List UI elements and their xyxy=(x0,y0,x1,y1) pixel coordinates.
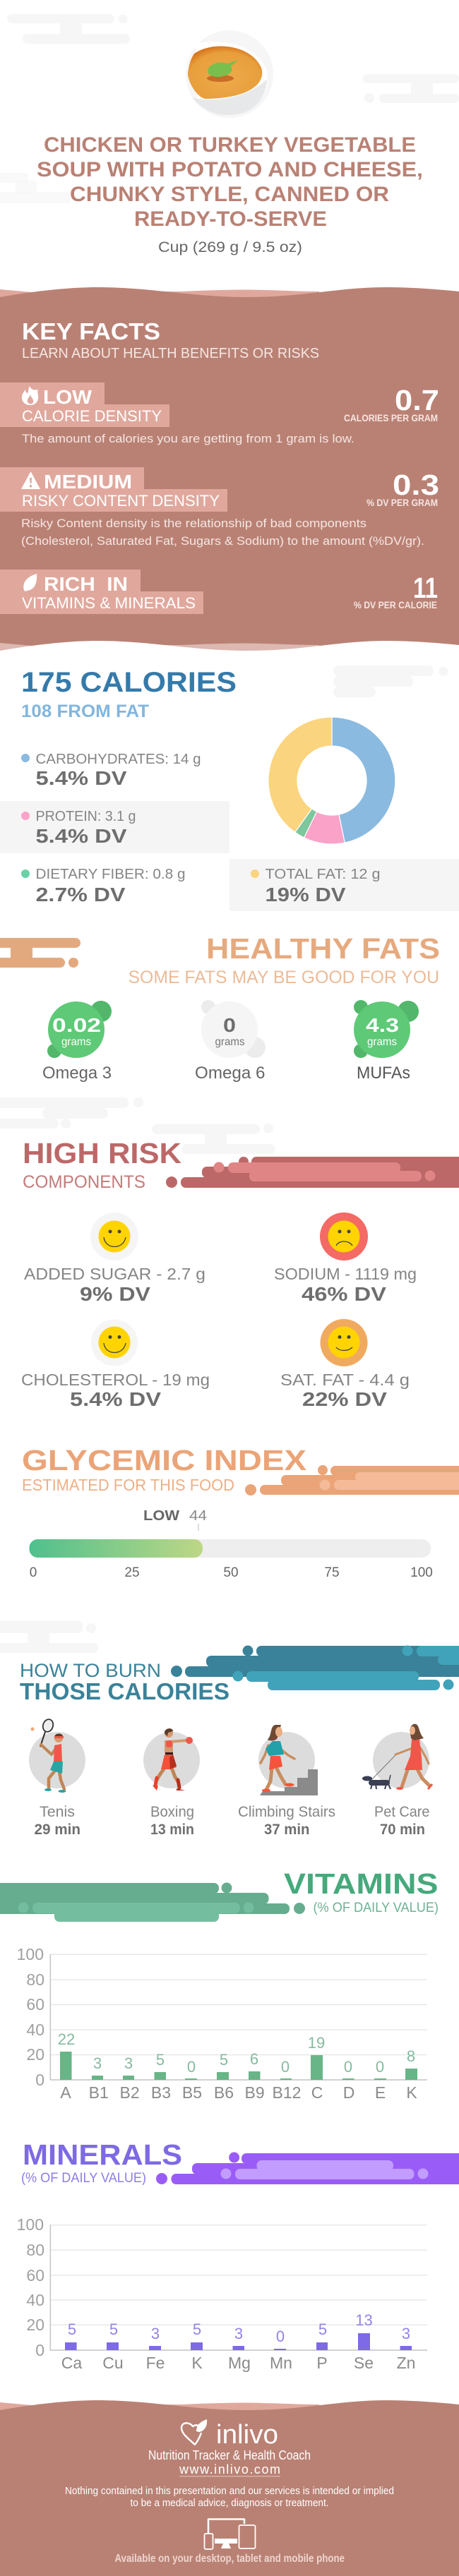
omega 6: 0 xyxy=(223,1014,236,1036)
bar chart: vitamins: B5 xyxy=(182,2083,202,2102)
decorative blob xyxy=(0,938,81,968)
bar chart: vitamins: D xyxy=(343,2083,354,2102)
title xyxy=(37,133,423,231)
mufas: 4.3 xyxy=(366,1014,399,1036)
decorative blob xyxy=(166,1157,459,1188)
bar chart: vitamins: 0 xyxy=(376,2058,384,2076)
omega 6: Omega 6 xyxy=(195,1064,266,1083)
subheading: (% OF DAILY VALUE) xyxy=(314,1901,439,1915)
bar chart: vitamins: 60 xyxy=(26,1995,44,2014)
omega 3: 0.02 xyxy=(52,1014,101,1036)
macro: dietary fiber xyxy=(21,867,185,905)
heading: HOW TO BURN xyxy=(20,1660,161,1681)
subheading: from fat: 108 FROM FAT xyxy=(21,702,149,721)
bar chart: vitamins: B6 xyxy=(214,2083,234,2102)
bar chart: vitamins xyxy=(17,1945,427,2102)
value: 0.3: 0.3 xyxy=(393,469,439,501)
bar chart: minerals: Zn xyxy=(397,2354,415,2372)
label: calorie density: CALORIE DENSITY xyxy=(22,407,162,425)
decorative cloud: burn xyxy=(0,1620,98,1653)
omega 6: grams xyxy=(215,1036,244,1048)
gauge axis: 50 xyxy=(223,1565,239,1580)
item: cholesterol xyxy=(21,1320,210,1410)
bar chart: vitamins: 22 xyxy=(58,2030,75,2048)
gauge axis: 0 xyxy=(30,1565,37,1580)
website: www.inlivo.com xyxy=(179,2462,280,2476)
decorative blob xyxy=(245,1465,459,1495)
item: saturated fat xyxy=(280,1319,410,1410)
disclaimer xyxy=(65,2485,394,2509)
bar chart: minerals: 3 xyxy=(151,2325,160,2342)
gauge axis: 100 xyxy=(410,1565,433,1580)
macro: carbohydrates xyxy=(21,752,201,789)
bar chart: minerals: Fe xyxy=(146,2354,165,2372)
macro: dietary fiber: DIETARY FIBER: 0.8 g xyxy=(35,867,185,882)
macro: total fat: 19% DV xyxy=(266,884,346,905)
section: glycemic index xyxy=(22,1444,459,1580)
decorative clouds: header xyxy=(0,14,459,203)
mufas: grams xyxy=(367,1036,397,1048)
bar chart: vitamins: 8 xyxy=(407,2047,415,2065)
bar chart: minerals: 0 xyxy=(35,2341,44,2359)
bar chart: vitamins: 20 xyxy=(26,2045,44,2064)
label: Climbing Stairs xyxy=(238,1804,335,1820)
bar chart: minerals: 13 xyxy=(355,2311,373,2329)
icon: warning triangle xyxy=(21,471,40,489)
heading: high risk: HIGH RISK xyxy=(23,1137,181,1169)
panel: key facts xyxy=(0,287,459,655)
description xyxy=(21,517,424,548)
decorative blob xyxy=(0,1883,305,1922)
heading xyxy=(20,1660,230,1704)
unit: dv per gram: % DV PER GRAM xyxy=(366,498,438,508)
availability note: Available on your desktop, tablet and mobile phone xyxy=(114,2553,345,2565)
item: cholesterol: 5.4% DV xyxy=(70,1388,161,1410)
macro: protein: 5.4% DV xyxy=(35,825,127,847)
tagline: Nutrition Tracker & Health Coach xyxy=(148,2448,311,2462)
value: 0.7: 0.7 xyxy=(395,384,439,416)
bar chart: minerals: Mn xyxy=(270,2354,292,2372)
bar chart: vitamins: 0 xyxy=(187,2058,196,2076)
bar chart: vitamins: 19 xyxy=(308,2034,325,2052)
bar chart: minerals: Cu xyxy=(102,2354,124,2372)
section: healthy fats xyxy=(0,932,440,1083)
bar chart: minerals: 0 xyxy=(276,2328,285,2345)
bar chart: vitamins: 0 xyxy=(281,2058,290,2076)
macro: protein xyxy=(0,801,230,853)
macro: total fat xyxy=(230,859,459,911)
icon: soup bowl xyxy=(186,30,273,118)
title: SOUP WITH POTATO AND CHEESE, xyxy=(37,158,423,181)
value: 11: 11 xyxy=(413,572,438,604)
level: medium: MEDIUM xyxy=(44,471,132,493)
description: The amount of calories you are getting from 1 gram is low. xyxy=(22,432,354,445)
activity: boxing xyxy=(143,1728,200,1838)
label: risky content density: RISKY CONTENT DENSITY xyxy=(22,492,220,510)
bar chart: vitamins: 40 xyxy=(26,2021,44,2039)
bar chart: minerals: 20 xyxy=(26,2316,44,2334)
bar chart: vitamins: 80 xyxy=(26,1970,44,1989)
heading: THOSE CALORIES xyxy=(20,1678,230,1704)
icon: leaf xyxy=(23,574,37,591)
decorative cloud: calories xyxy=(333,666,448,697)
omega 6 xyxy=(195,1000,266,1083)
description: Risky Content density is the relationship of bad components xyxy=(21,517,366,530)
bar chart: minerals: 3 xyxy=(402,2325,410,2342)
bar chart: vitamins: B3 xyxy=(151,2083,171,2102)
label: Boxing xyxy=(150,1804,194,1820)
bar chart: minerals: 5 xyxy=(193,2321,201,2338)
section: calories xyxy=(0,667,459,911)
fact: rich in vitamins and minerals xyxy=(0,570,438,614)
bar chart: vitamins: 5 xyxy=(156,2051,165,2069)
bar chart: vitamins: 5 xyxy=(220,2051,228,2069)
icon: flame xyxy=(22,386,38,405)
heading: key facts: KEY FACTS xyxy=(22,318,160,344)
item: added sugar xyxy=(24,1212,205,1305)
decorative blob xyxy=(171,1646,459,1690)
subheading: ESTIMATED FOR THIS FOOD xyxy=(22,1476,234,1494)
duration: 29 min xyxy=(34,1822,81,1838)
logo text: inlivo xyxy=(216,2420,278,2450)
heading: vitamins: VITAMINS xyxy=(284,1867,438,1900)
section: minerals xyxy=(17,2138,459,2372)
bar chart: minerals: Mg xyxy=(228,2354,251,2372)
macro: protein: PROTEIN: 3.1 g xyxy=(35,809,136,824)
macro: dietary fiber: 2.7% DV xyxy=(35,884,126,905)
item: added sugar: ADDED SUGAR - 2.7 g xyxy=(24,1265,205,1283)
gauge axis xyxy=(30,1565,433,1580)
bar chart: minerals: 60 xyxy=(26,2266,44,2285)
subheading: key facts: LEARN ABOUT HEALTH BENEFITS OR RISKS xyxy=(22,346,319,361)
serving size: Cup (269 g / 9.5 oz) xyxy=(158,239,302,255)
gauge axis: 75 xyxy=(324,1565,340,1580)
subheading: (% OF DAILY VALUE) xyxy=(21,2171,146,2186)
title: CHUNKY STYLE, CANNED OR xyxy=(70,183,389,206)
bar chart: minerals: Se xyxy=(354,2354,374,2372)
bar chart: vitamins: 3 xyxy=(124,2054,133,2072)
bar chart: vitamins: 100 xyxy=(17,1945,44,1963)
section: vitamins xyxy=(0,1867,439,2102)
duration: 13 min xyxy=(150,1822,194,1838)
unit: calories per gram: CALORIES PER GRAM xyxy=(344,413,438,423)
bar chart: minerals: 100 xyxy=(17,2215,44,2234)
bar chart: minerals: K xyxy=(191,2354,203,2372)
bar chart: vitamins: B2 xyxy=(120,2083,140,2102)
item: sodium: SODIUM - 1119 mg xyxy=(274,1265,417,1283)
heading: glycemic index: GLYCEMIC INDEX xyxy=(22,1444,306,1476)
duration: 37 min xyxy=(264,1822,309,1838)
mufas xyxy=(354,1000,419,1083)
bar chart: minerals xyxy=(17,2215,427,2372)
mufas: MUFAs xyxy=(357,1064,410,1083)
level: low: LOW xyxy=(43,386,93,408)
gauge label xyxy=(143,1508,207,1531)
item: cholesterol: CHOLESTEROL - 19 mg xyxy=(21,1371,210,1389)
subheading: components: COMPONENTS xyxy=(23,1172,145,1192)
gauge label: 44 xyxy=(189,1508,207,1524)
macro: total fat: TOTAL FAT: 12 g xyxy=(266,867,380,882)
bar chart: vitamins: B1 xyxy=(89,2083,109,2102)
item: sodium: 46% DV xyxy=(302,1283,386,1305)
activity: tennis xyxy=(29,1718,85,1838)
bar chart: minerals: 40 xyxy=(26,2291,44,2309)
gauge axis: 25 xyxy=(124,1565,140,1580)
decorative blob xyxy=(156,2153,459,2184)
bar chart: minerals: 5 xyxy=(318,2321,327,2338)
bar chart: vitamins: C xyxy=(311,2083,323,2102)
level: rich in: RICH IN xyxy=(44,573,128,595)
description: (Cholesterol, Saturated Fat, Sugars & Sodium) to the amount (%DV/gr). xyxy=(21,534,424,548)
title: CHICKEN OR TURKEY VEGETABLE xyxy=(44,133,416,157)
bar chart: vitamins: 6 xyxy=(250,2050,258,2068)
icon: devices xyxy=(205,2520,256,2549)
bar chart: minerals: 5 xyxy=(109,2321,118,2338)
bar chart: vitamins: K xyxy=(406,2083,417,2102)
bar chart: vitamins: 3 xyxy=(93,2054,102,2072)
heading: healthy fats: HEALTHY FATS xyxy=(206,932,440,965)
gauge bar xyxy=(30,1539,431,1558)
heading: minerals: MINERALS xyxy=(23,2138,182,2171)
bar chart: vitamins: A xyxy=(60,2083,71,2102)
omega 3: grams xyxy=(61,1036,91,1048)
macro: carbohydrates: 5.4% DV xyxy=(35,767,127,789)
item: sodium xyxy=(274,1212,417,1305)
item: saturated fat: SAT. FAT - 4.4 g xyxy=(280,1371,410,1389)
bar chart: vitamins: 0 xyxy=(344,2058,352,2076)
logo: heart and leaf xyxy=(181,2419,207,2445)
bar chart: minerals: 3 xyxy=(234,2325,243,2342)
bar chart: minerals: P xyxy=(316,2354,328,2372)
bar chart: vitamins: 0 xyxy=(35,2071,44,2089)
fact: risky content density xyxy=(0,467,439,548)
activity: pet care xyxy=(362,1724,432,1838)
bar chart: minerals: 80 xyxy=(26,2241,44,2259)
label: Tenis xyxy=(40,1804,75,1820)
section: how to burn xyxy=(20,1646,459,1838)
donut chart xyxy=(268,717,395,844)
omega 3 xyxy=(42,1001,112,1083)
activity: climbing stairs xyxy=(238,1725,335,1838)
item: saturated fat: 22% DV xyxy=(302,1388,387,1410)
duration: 70 min xyxy=(380,1822,425,1838)
label: vitamins and minerals: VITAMINS & MINERALS xyxy=(22,594,196,612)
bar chart: vitamins: B12 xyxy=(273,2083,301,2102)
fact: calorie density xyxy=(0,383,439,445)
footer panel xyxy=(0,2400,459,2576)
bar chart: vitamins: B9 xyxy=(245,2083,265,2102)
omega 3: Omega 3 xyxy=(42,1064,112,1083)
disclaimer: to be a medical advice, diagnosis or treatment. xyxy=(130,2497,329,2509)
title: READY-TO-SERVE xyxy=(134,207,327,231)
subheading: SOME FATS MAY BE GOOD FOR YOU xyxy=(129,968,439,987)
disclaimer: Nothing contained in this presentation and our services is intended or implied xyxy=(65,2485,394,2497)
section: high risk xyxy=(21,1137,459,1410)
unit: dv per calorie: % DV PER CALORIE xyxy=(354,600,437,610)
label: Pet Care xyxy=(374,1804,429,1820)
decorative clouds: high risk xyxy=(0,1097,275,1154)
bar chart: minerals: 5 xyxy=(68,2321,76,2338)
macro: carbohydrates: CARBOHYDRATES: 14 g xyxy=(35,752,201,767)
heading: 175 calories: 175 CALORIES xyxy=(21,667,237,698)
gauge label: LOW xyxy=(143,1508,179,1524)
bar chart: minerals: Ca xyxy=(61,2354,82,2372)
item: added sugar: 9% DV xyxy=(80,1283,150,1305)
bar chart: vitamins: E xyxy=(375,2083,386,2102)
